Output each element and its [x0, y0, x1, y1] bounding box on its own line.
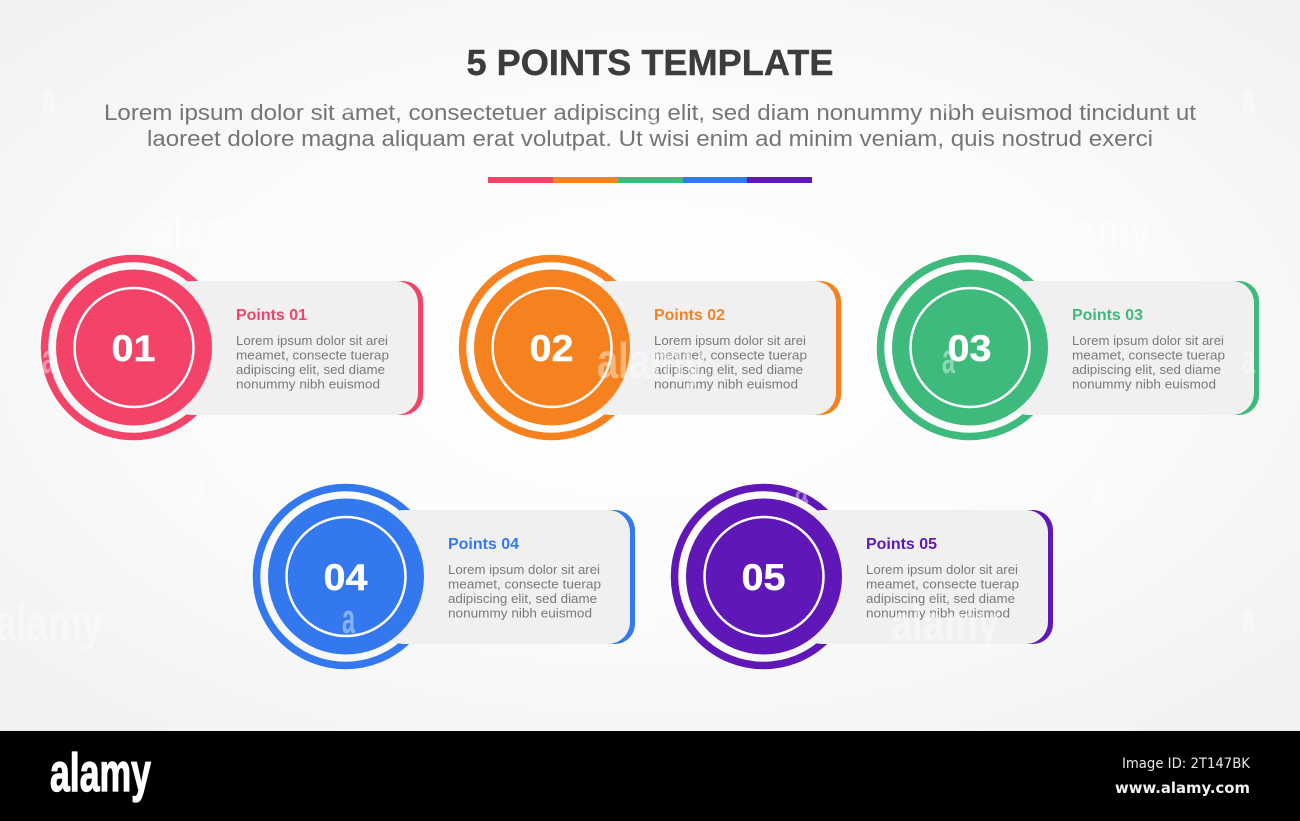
- number badge 05: 05: [742, 557, 786, 598]
- body text 02: nonummy nibh euismod: [654, 378, 798, 392]
- watermarks: [0, 75, 1255, 651]
- watermarks: a: [795, 465, 808, 512]
- watermarks: a: [942, 335, 955, 382]
- body text 02: [654, 334, 807, 392]
- number badge 01: 01: [112, 328, 156, 369]
- heading 02: Points 02: [654, 307, 725, 324]
- panel: point 05: [674, 488, 1053, 666]
- watermarks: alamy: [1043, 202, 1151, 258]
- body text 01: adipiscing elit, sed diame: [236, 363, 385, 377]
- body text 01: meamet, consecte tuerap: [236, 348, 389, 362]
- website: www.alamy.com: [1115, 779, 1250, 797]
- body text 02: Lorem ipsum dolor sit arei: [654, 334, 806, 348]
- watermarks: alamy: [891, 595, 999, 651]
- number badge 03: [892, 270, 1048, 426]
- body text 04: nonummy nibh euismod: [448, 606, 592, 620]
- body text 05: nonummy nibh euismod: [866, 606, 1010, 620]
- watermarks: a: [942, 75, 955, 122]
- heading 05: Points 05: [866, 536, 937, 553]
- watermarks: a: [1091, 465, 1104, 512]
- body text 05: [866, 563, 1019, 620]
- watermarks: a: [1242, 595, 1255, 642]
- heading 03: Points 03: [1072, 307, 1143, 324]
- watermarks: a: [491, 465, 504, 512]
- body text 03: adipiscing elit, sed diame: [1072, 363, 1221, 377]
- number badge 04: [268, 498, 424, 654]
- watermarks: a: [1242, 75, 1255, 122]
- body text 04: adipiscing elit, sed diame: [448, 592, 597, 606]
- intro text: [104, 100, 1196, 151]
- footer logo: alamy: [50, 743, 151, 803]
- colour divider bar: [488, 177, 812, 183]
- watermarks: a: [644, 86, 657, 133]
- number badge 02: 02: [530, 328, 574, 369]
- number badge 02: [474, 270, 630, 426]
- body text 05: Lorem ipsum dolor sit arei: [866, 563, 1018, 577]
- watermarks: a: [42, 335, 55, 382]
- watermarks: alamy: [597, 333, 705, 389]
- body text 01: [236, 334, 389, 392]
- body text 02: meamet, consecte tuerap: [654, 348, 807, 362]
- watermarks: a: [1242, 335, 1255, 382]
- body text 05: meamet, consecte tuerap: [866, 578, 1019, 592]
- body text 03: nonummy nibh euismod: [1072, 378, 1216, 392]
- footer bar: [0, 731, 1300, 821]
- body text 04: Lorem ipsum dolor sit arei: [448, 563, 600, 577]
- number badge 05: [686, 498, 842, 654]
- panel: point 04: [256, 488, 635, 666]
- body text 05: adipiscing elit, sed diame: [866, 592, 1015, 606]
- image id: Image ID: 2T147BK: [1122, 756, 1251, 772]
- body text 03: meamet, consecte tuerap: [1072, 348, 1225, 362]
- watermarks: alamy: [152, 202, 260, 258]
- intro text: Lorem ipsum dolor sit amet, consectetuer adipiscing elit, sed diam nonummy nibh euismod tincidunt ut: [104, 100, 1196, 125]
- panel: point 01: [44, 258, 423, 436]
- body text 02: adipiscing elit, sed diame: [654, 363, 803, 377]
- panel: point 03: [880, 258, 1259, 436]
- body text 03: [1072, 334, 1225, 392]
- heading 04: Points 04: [448, 536, 519, 553]
- title: 5 POINTS TEMPLATE: [466, 42, 834, 83]
- watermarks: a: [342, 595, 355, 642]
- heading 01: Points 01: [236, 307, 307, 324]
- intro text: laoreet dolore magna aliquam erat volutpat. Ut wisi enim ad minim veniam, quis nostrud exerci: [147, 126, 1153, 151]
- panel: point 02: [462, 258, 841, 436]
- body text 01: nonummy nibh euismod: [236, 378, 380, 392]
- watermarks: a: [192, 465, 205, 512]
- number badge 04: 04: [324, 557, 368, 598]
- number badge 01: [56, 270, 212, 426]
- body text 03: Lorem ipsum dolor sit arei: [1072, 334, 1224, 348]
- watermarks: a: [642, 595, 655, 642]
- watermarks: a: [342, 75, 355, 122]
- watermarks: a: [42, 75, 55, 122]
- body text 01: Lorem ipsum dolor sit arei: [236, 334, 388, 348]
- number badge 03: 03: [948, 328, 992, 369]
- body text 04: meamet, consecte tuerap: [448, 578, 601, 592]
- body text 04: [448, 563, 601, 620]
